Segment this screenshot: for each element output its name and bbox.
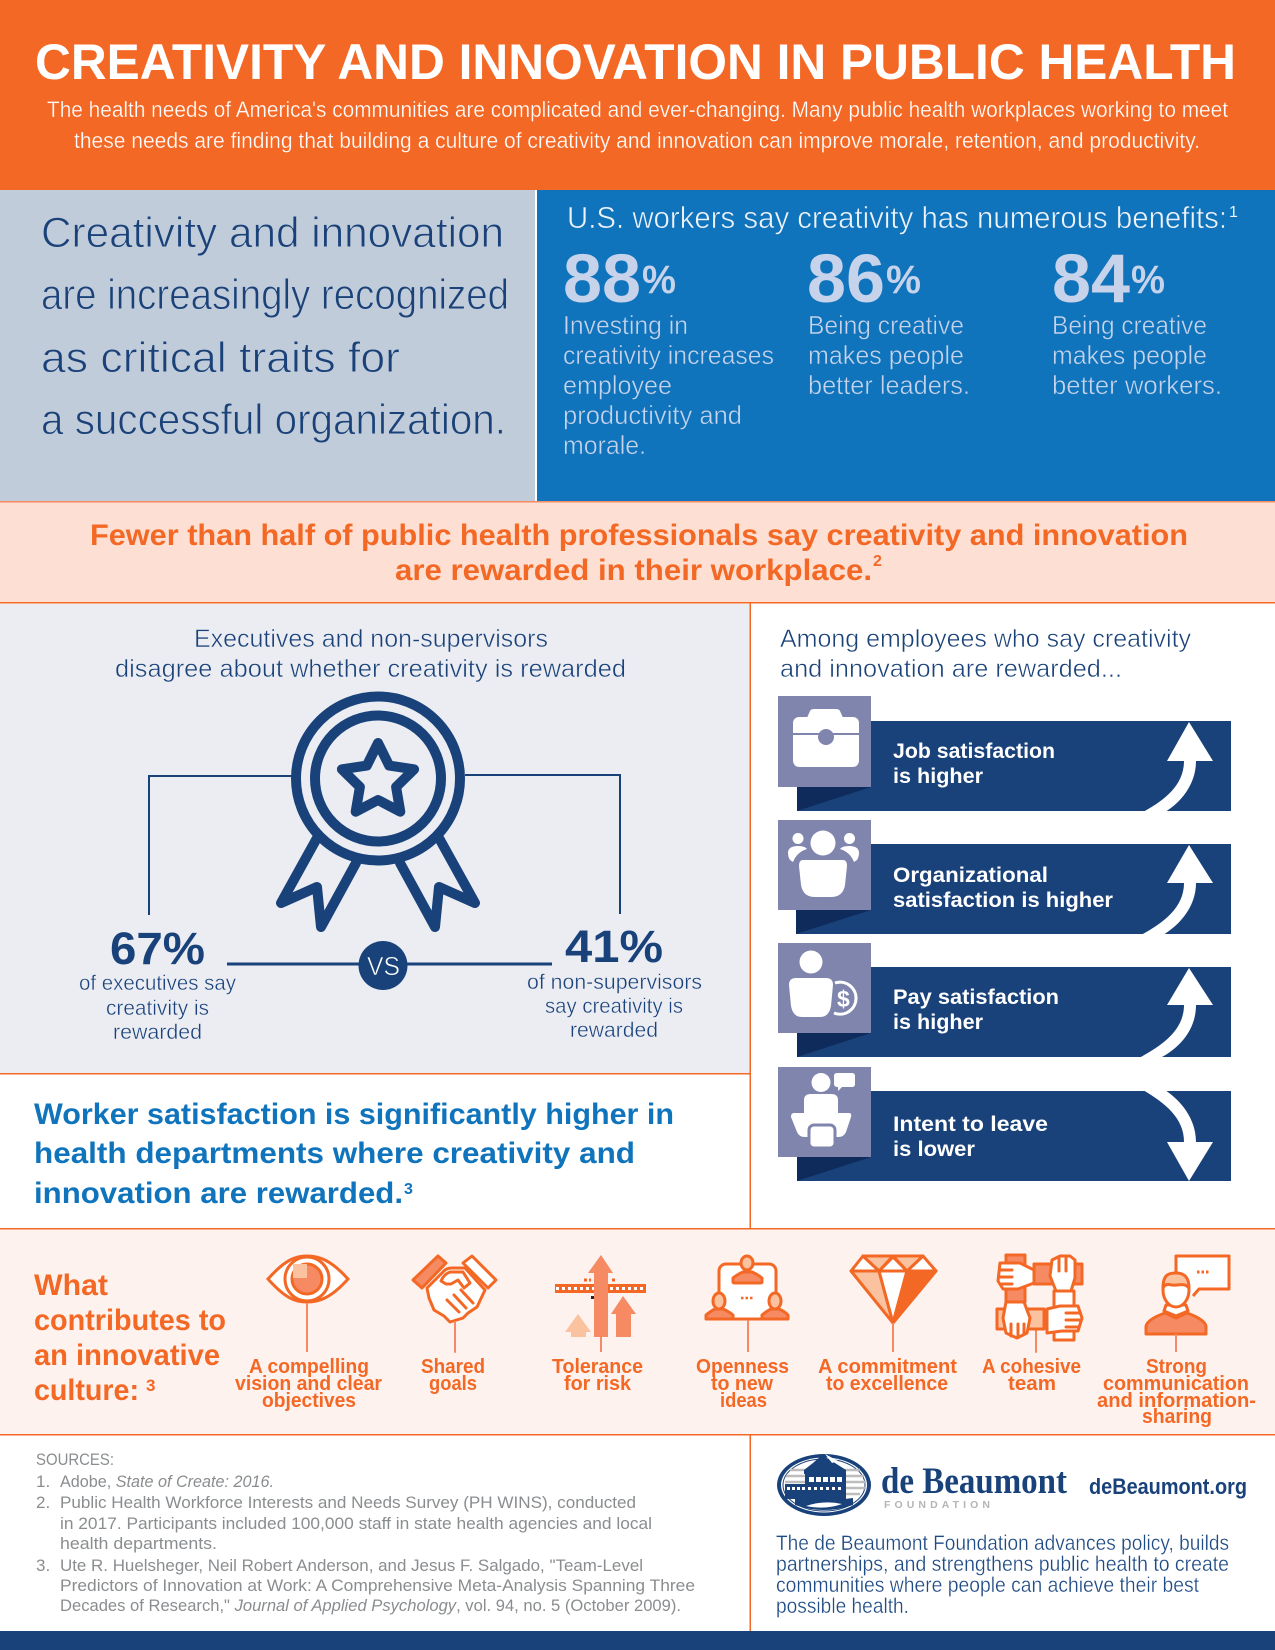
callout: worker satisfaction: Worker satisfaction is significantly higher in: [34, 1098, 674, 1131]
culture heading: contributes to: [34, 1304, 226, 1337]
culture heading: 3: [146, 1376, 155, 1395]
item: strong communication: [1097, 1256, 1256, 1428]
stat: 88 percent: productivity and: [563, 400, 742, 430]
item label: [421, 1356, 485, 1395]
item label: vision and clear: [235, 1373, 382, 1395]
de Beaumont logo: de Beaumont: [881, 1461, 1068, 1502]
outcome label: [893, 864, 1113, 912]
stat: 88 percent: creativity increases: [563, 340, 774, 370]
stat: 84 percent: Being creative: [1052, 310, 1207, 340]
foundation description: [776, 1532, 1229, 1618]
panel: creativity statement: as critical traits for: [41, 334, 400, 382]
stat: 86 percent: better leaders.: [808, 370, 970, 400]
icon: four linked hands: [997, 1255, 1082, 1352]
sources list: 3.: [36, 1556, 50, 1575]
item label: for risk: [564, 1373, 632, 1395]
stat: 86 percent: 86: [807, 240, 885, 317]
outcome label: [893, 740, 1055, 788]
stat: 84 percent: makes people: [1052, 340, 1207, 370]
item label: [982, 1356, 1081, 1395]
icon: person at laptop with speech bubble: [791, 1073, 855, 1148]
item label: [818, 1356, 957, 1395]
stat: 88 percent: 88: [563, 240, 641, 317]
item label: A cohesive: [982, 1356, 1081, 1378]
item label: [235, 1356, 382, 1412]
item label: communication: [1103, 1373, 1249, 1395]
stat: 86 percent: Being creative: [808, 310, 964, 340]
panel: fewer than half callout: 2: [873, 553, 882, 570]
intro text: The health needs of America's communities are complicated and ever-changing. Many public health workplaces working to meet: [47, 97, 1228, 122]
benefits heading: U.S. workers say creativity has numerous benefits:: [567, 200, 1227, 235]
icon: person with dollar: $: [837, 986, 850, 1012]
stat: 67 percent of executives: [79, 923, 236, 1044]
item label: and information-: [1097, 1390, 1256, 1412]
sources list: health departments.: [60, 1534, 217, 1553]
outcome label: Intent to leave: [893, 1113, 1048, 1136]
panel: worker benefits: [537, 190, 1275, 502]
panel heading: [115, 625, 626, 683]
outcomes heading: and innovation are rewarded...: [780, 655, 1122, 683]
stat: 84 percent: 84: [1052, 240, 1130, 317]
sources list: in 2017. Participants included 100,000 staff in state health agencies and local: [60, 1514, 652, 1533]
icon: eye: [268, 1256, 348, 1352]
outcome label: is higher: [893, 765, 983, 788]
panel: fewer than half callout: Fewer than half of public health professionals say creativity and innovation: [90, 519, 1188, 552]
outcomes heading: [780, 625, 1191, 683]
sources list: SOURCES:: [36, 1450, 114, 1469]
item: commitment to excellence: [818, 1256, 957, 1395]
item label: Tolerance: [552, 1356, 643, 1378]
callout: worker satisfaction: innovation are rewarded.: [34, 1177, 403, 1210]
outcomes heading: Among employees who say creativity: [780, 625, 1191, 653]
foundation description: The de Beaumont Foundation advances policy, builds: [776, 1532, 1229, 1555]
item label: [696, 1356, 789, 1412]
item label: objectives: [262, 1390, 356, 1412]
panel: creativity statement: [0, 190, 535, 502]
benefits heading: 1: [1229, 204, 1238, 221]
icon: award medal: [281, 696, 475, 927]
stat: 88 percent: [563, 240, 774, 460]
sources list: 2.: [36, 1493, 50, 1512]
item label: A compelling: [249, 1356, 369, 1378]
culture heading: [34, 1269, 226, 1407]
de Beaumont logo: FOUNDATION: [884, 1499, 990, 1511]
callout: worker satisfaction: health departments where creativity and: [34, 1137, 635, 1170]
row: intent to leave: [778, 1067, 1231, 1181]
outcome label: Pay satisfaction: [893, 986, 1059, 1009]
outcome label: is higher: [893, 1011, 983, 1034]
stat: 41 percent of non-supervisors: of non-supervisors: [527, 971, 702, 994]
panel: fewer than half callout: are rewarded in their workplace.: [395, 554, 872, 587]
stat: 84 percent: [1052, 240, 1222, 400]
icon: diamond: [851, 1256, 936, 1352]
panel: creativity statement: a successful organization.: [41, 396, 506, 444]
item label: Strong: [1146, 1356, 1207, 1378]
item label: A commitment: [818, 1356, 957, 1378]
row: organizational satisfaction: [778, 820, 1231, 935]
panel heading: disagree about whether creativity is rewarded: [115, 655, 626, 683]
panel: creativity statement: Creativity and innovation: [41, 209, 504, 257]
item label: ideas: [720, 1390, 767, 1412]
stat: 41 percent of non-supervisors: 41%: [565, 921, 663, 972]
sources list: 1.: [36, 1472, 50, 1491]
row: pay satisfaction: [778, 943, 1231, 1058]
stat: 41 percent of non-supervisors: [527, 921, 702, 1042]
icon: handshake: [413, 1256, 496, 1352]
intro text: [47, 97, 1228, 153]
icon: VS badge: [358, 941, 408, 990]
stat: 67 percent of executives: 67%: [110, 923, 205, 974]
stat: 67 percent of executives: rewarded: [113, 1021, 202, 1044]
item: openness to new ideas: [696, 1256, 789, 1412]
panel: innovative culture contributors: [0, 1228, 1275, 1436]
icon: three people around a board: [706, 1256, 788, 1352]
item label: Openness: [696, 1356, 789, 1378]
stat: 67 percent of executives: creativity is: [106, 997, 209, 1020]
stat: 86 percent: makes people: [808, 340, 964, 370]
sources list: Decades of Research," Journal of Applied Psychology, vol. 94, no. 5 (October 2009).: [60, 1596, 681, 1615]
sources list: Adobe, State of Create: 2016.: [60, 1472, 274, 1491]
item label: sharing: [1142, 1406, 1212, 1428]
item label: goals: [429, 1373, 477, 1395]
outcome label: [893, 1113, 1048, 1161]
culture heading: culture:: [34, 1374, 139, 1407]
item: shared goals: [413, 1256, 496, 1395]
header banner: [0, 0, 1275, 190]
foundation description: partnerships, and strengthens public health to create: [776, 1553, 1229, 1576]
panel heading: Executives and non-supervisors: [194, 625, 548, 653]
item label: [552, 1356, 643, 1395]
item: compelling vision: [235, 1256, 382, 1412]
stat: 84 percent: better workers.: [1052, 370, 1222, 400]
outcome label: satisfaction is higher: [893, 889, 1113, 912]
icon: person with dollar: [789, 950, 856, 1017]
icon: person with speech bubble: [1146, 1256, 1229, 1352]
intro text: these needs are finding that building a culture of creativity and innovation can improve morale, retention, and productivity.: [74, 128, 1200, 153]
stat: 88 percent: %: [642, 258, 676, 302]
icon: VS badge: VS: [367, 951, 400, 981]
item: cohesive team: [982, 1255, 1082, 1395]
stat: 41 percent of non-supervisors: say creativity is: [545, 995, 683, 1018]
culture heading: an innovative: [34, 1339, 220, 1372]
stat: 88 percent: employee: [563, 370, 672, 400]
stat: 84 percent: %: [1131, 258, 1165, 302]
row: job satisfaction: [778, 696, 1231, 812]
item: tolerance for risk: [552, 1255, 646, 1395]
sources list: Predictors of Innovation at Work: A Comprehensive Meta-Analysis Spanning Three: [60, 1576, 695, 1595]
panel: fewer than half callout: [0, 501, 1275, 604]
logo emblem: [777, 1454, 871, 1516]
footer bar: [0, 1631, 1275, 1650]
sources list: Ute R. Huelsheger, Neil Robert Anderson, and Jesus F. Salgado, "Team-Level: [60, 1556, 643, 1575]
sources list: Public Health Workforce Interests and Needs Survey (PH WINS), conducted: [60, 1493, 636, 1512]
stat: 86 percent: %: [886, 258, 921, 302]
title: CREATIVITY AND INNOVATION IN PUBLIC HEALTH: [35, 34, 1236, 90]
outcome label: is lower: [893, 1138, 975, 1161]
foundation description: communities where people can achieve their best: [776, 1574, 1199, 1597]
connector lines: [149, 775, 620, 964]
stat: 88 percent: Investing in: [563, 310, 688, 340]
icon: arrows through barrier: [555, 1255, 646, 1352]
stat: 86 percent: [807, 240, 970, 400]
callout: worker satisfaction: [34, 1098, 674, 1210]
outcome label: [893, 986, 1059, 1034]
item label: to new: [711, 1373, 773, 1395]
panel: executives vs non-supervisors: [0, 604, 750, 1073]
panel: creativity statement: are increasingly recognized: [41, 271, 509, 319]
icon: group of people: [788, 830, 859, 897]
sources list: [36, 1450, 695, 1615]
stat: 41 percent of non-supervisors: rewarded: [570, 1019, 658, 1042]
de Beaumont logo: [777, 1454, 1068, 1516]
foundation description: possible health.: [776, 1595, 909, 1618]
stat: 88 percent: morale.: [563, 430, 646, 460]
panel: employee outcomes: [778, 625, 1231, 1181]
outcome label: Job satisfaction: [893, 740, 1055, 763]
icon: briefcase: [793, 709, 859, 767]
stat: 67 percent of executives: of executives say: [79, 972, 236, 995]
item label: [1097, 1356, 1256, 1428]
item label: to excellence: [826, 1373, 948, 1395]
item label: team: [1008, 1373, 1056, 1395]
item label: Shared: [421, 1356, 485, 1378]
culture heading: What: [34, 1269, 108, 1302]
outcome label: Organizational: [893, 864, 1048, 887]
callout: worker satisfaction: 3: [404, 1181, 413, 1198]
website link: deBeaumont.org: [1089, 1474, 1247, 1499]
